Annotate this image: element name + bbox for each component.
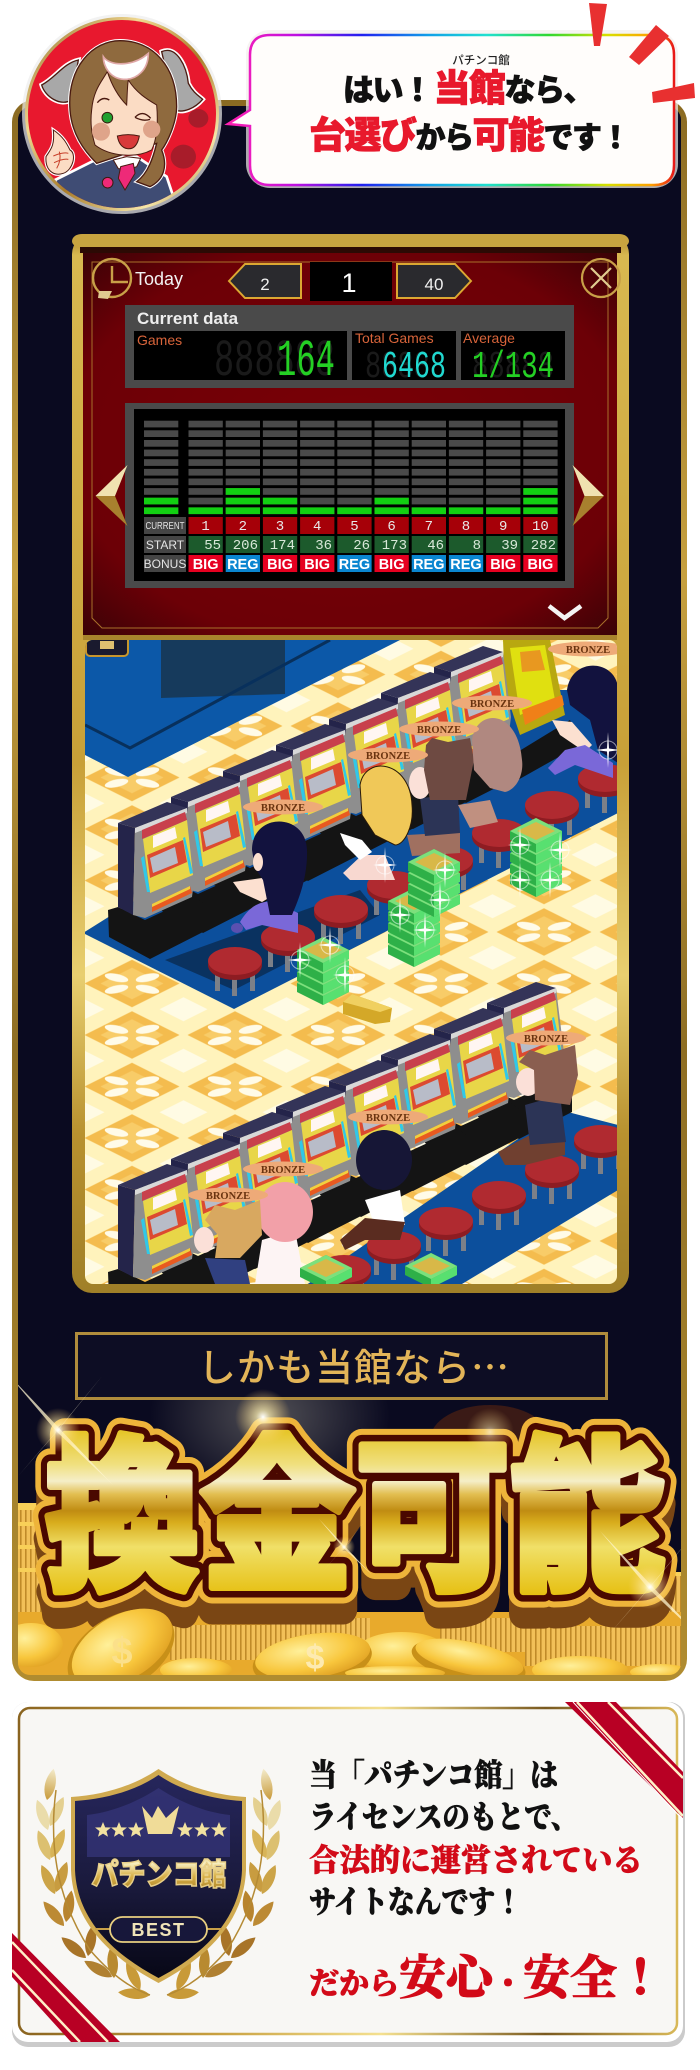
ribbon: top right — [565, 1702, 683, 1820]
today label: Today — [135, 269, 183, 289]
character: pink hair girl — [255, 1182, 313, 1284]
loose coins: $ — [306, 1639, 325, 1677]
license copy: サイトなんです！ — [309, 1885, 522, 1920]
row: bonus: REG — [339, 557, 370, 573]
main dark panel — [12, 100, 687, 1681]
games counter: 888888 — [214, 332, 335, 391]
row: bonus — [144, 555, 558, 573]
row: start: 39 — [501, 538, 518, 554]
bronze name tags: BRONZE — [417, 725, 461, 736]
panel: bonus banner — [18, 1332, 681, 1675]
row: start: 206 — [233, 538, 258, 554]
character: man brown hair — [407, 738, 474, 856]
license copy: 合法的に運営されている — [309, 1843, 643, 1878]
title: kankin kanou: 換金可能 — [45, 1383, 665, 1624]
games counter: 164 — [277, 332, 335, 391]
prev button — [229, 264, 301, 298]
row: current: 3 — [276, 519, 284, 535]
arrow: right — [572, 465, 604, 526]
license copy: だから安心・安全！ — [309, 1953, 664, 2005]
row: start: 174 — [270, 538, 295, 554]
total games counter: Total Games — [355, 330, 434, 346]
panel: current data: Current data — [137, 309, 239, 328]
row: current: 1 — [201, 519, 210, 535]
row: start: START — [146, 538, 185, 552]
row: bonus: BIG — [528, 557, 553, 573]
bronze name tags: BRONZE — [524, 1034, 568, 1045]
arrow: left — [96, 465, 128, 526]
average counter: 88888 — [472, 346, 554, 389]
average counter: 1/134 — [472, 346, 554, 389]
character: dark-haired woman — [231, 822, 307, 933]
row: current: 7 — [425, 519, 433, 535]
row: start: 282 — [531, 538, 556, 554]
carpets — [83, 640, 618, 1290]
row: start: 8 — [473, 538, 481, 554]
row: start — [144, 536, 558, 554]
row 2 of slot machines — [108, 982, 572, 1284]
shield logotype: パチンコ館 — [92, 1850, 226, 1894]
row: current: 4 — [313, 519, 321, 535]
row: start: 173 — [382, 538, 407, 554]
license copy: 当「パチンコ館」は — [309, 1758, 558, 1793]
bronze name tags: BRONZE — [261, 803, 305, 814]
ribbon: bottom left — [12, 1933, 120, 2042]
panel: today's data overlay — [83, 253, 620, 640]
next button — [397, 264, 471, 298]
loose coins — [18, 1608, 680, 1675]
row: start: 55 — [204, 538, 221, 554]
average counter — [461, 330, 565, 389]
row: current: 6 — [387, 519, 396, 535]
row: bonus: BIG — [304, 557, 330, 573]
sparkles on title — [8, 1374, 700, 1642]
games counter — [134, 331, 347, 391]
cash stacks — [297, 818, 562, 1290]
character: blond boy — [194, 1200, 262, 1284]
row: bonus: BONUS — [144, 557, 186, 571]
bronze name tags: BRONZE — [366, 1113, 410, 1124]
panel: license card — [12, 1702, 685, 2047]
total games counter — [352, 330, 456, 389]
character: spiky brown man — [498, 1045, 578, 1165]
row: current — [144, 517, 558, 535]
current page number — [310, 262, 392, 301]
next button: 40 — [425, 275, 443, 294]
row: current: 8 — [462, 519, 470, 535]
character: pink-brown hair — [458, 718, 522, 828]
bronze name tags: BRONZE — [261, 1165, 305, 1176]
burst lines — [589, 3, 695, 103]
license copy: ライセンスのもとで、 — [309, 1800, 578, 1835]
panel: slot history chart — [125, 403, 574, 588]
bronze name tags: BRONZE — [206, 1191, 250, 1202]
average counter: Average — [463, 330, 515, 346]
row: start: 36 — [315, 538, 332, 554]
subheading box — [76, 1334, 606, 1398]
character: dark hair woman right — [548, 666, 618, 778]
stars — [95, 1822, 227, 1837]
game scene — [83, 636, 632, 1321]
ruby text: パチンコ館 — [452, 52, 510, 68]
loose coins: $ — [111, 1631, 133, 1673]
coin stacks — [18, 1503, 681, 1675]
shield badge — [71, 1769, 246, 1983]
laurel left — [32, 1768, 150, 2000]
row: start: 26 — [353, 538, 370, 554]
best pill — [95, 1917, 222, 1942]
character: blonde woman — [340, 766, 412, 880]
speech bubble — [228, 30, 678, 188]
menu button corner — [85, 640, 129, 657]
icon: clock — [93, 259, 131, 299]
sparkles — [288, 732, 620, 993]
bubble line 1: はい！当館なら、 — [343, 58, 593, 112]
row: current: CURRENT — [146, 520, 185, 532]
license copy — [309, 1758, 664, 2005]
row: current: 10 — [532, 519, 549, 535]
bubble line 2: 台選びから可能です！ — [309, 105, 629, 159]
icon: chevron down — [549, 606, 581, 618]
row: bonus: REG — [413, 557, 445, 573]
game screenshot frame — [72, 234, 632, 1321]
row 1 of slot machines — [108, 646, 580, 959]
total games counter: 6468 — [382, 346, 446, 389]
row: current: 2 — [239, 519, 247, 535]
laurel right — [167, 1768, 285, 2000]
crown — [142, 1806, 179, 1834]
row: bonus: BIG — [193, 557, 218, 573]
row: current: 5 — [350, 519, 359, 535]
bronze name tags — [188, 642, 628, 1202]
bronze name tags: BRONZE — [566, 645, 610, 656]
row: bonus: BIG — [267, 557, 293, 573]
current page number: 1 — [341, 268, 357, 298]
row: bonus: REG — [227, 557, 259, 573]
gold bar — [343, 994, 392, 1024]
subheading box: しかも当館なら… — [198, 1337, 510, 1392]
stools row 1 — [208, 764, 632, 996]
row: bonus: BIG — [490, 557, 516, 573]
character: dark hair man — [340, 1130, 412, 1250]
close button — [582, 259, 620, 297]
games counter: Games — [137, 332, 182, 348]
bronze name tags: BRONZE — [470, 699, 514, 710]
avatar — [22, 14, 222, 223]
row: start: 46 — [427, 538, 444, 554]
title: kankin kanou: 換金可能 — [45, 1383, 665, 1624]
bronze name tags: BRONZE — [366, 751, 410, 762]
gold machine — [503, 640, 565, 735]
floor — [85, 640, 617, 1284]
bar chart — [144, 421, 558, 514]
row: current: 9 — [499, 519, 507, 535]
title extrusion: 換金可能 — [45, 1405, 665, 1646]
stools row 2 — [330, 1125, 617, 1284]
title: kankin kanou: 換金可能 — [45, 1383, 665, 1624]
total games counter: 88888 — [365, 346, 446, 389]
row: bonus: BIG — [379, 557, 404, 573]
row: bonus: REG — [450, 557, 482, 573]
prev button: 2 — [260, 275, 270, 294]
panel: current data — [125, 305, 574, 391]
best pill: BEST — [131, 1920, 186, 1940]
